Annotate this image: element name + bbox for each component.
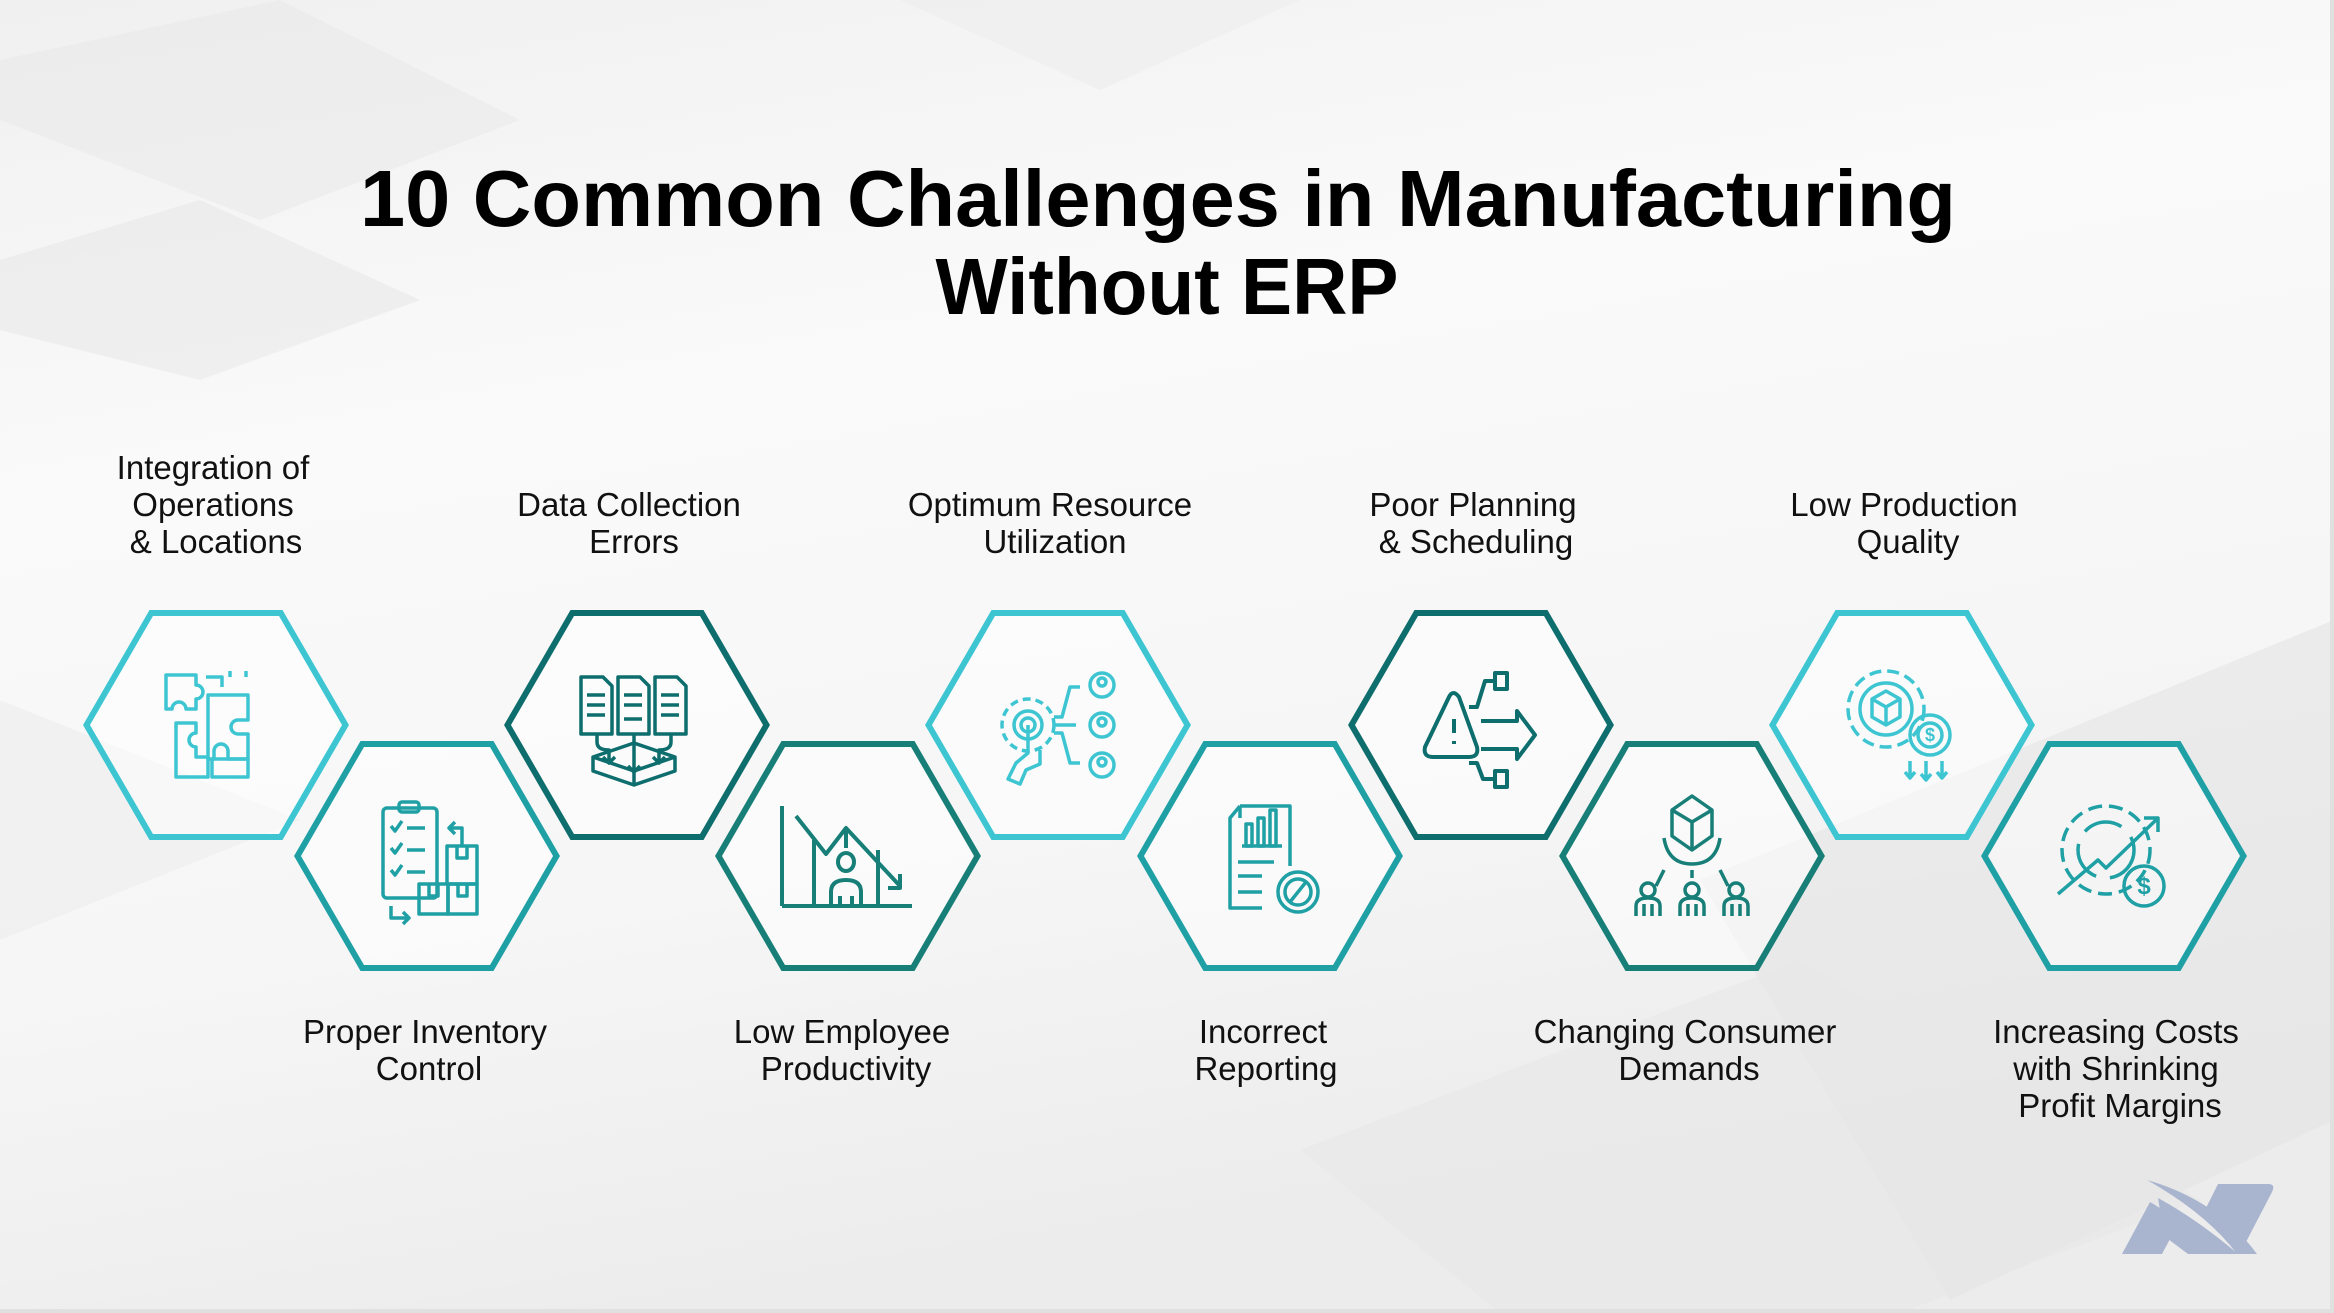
icon: gear box coin: $ [1925,725,1935,745]
label: consumer demands: Changing Consumer [1534,1013,1836,1050]
title: 10 Common Challenges in Manufacturing [360,154,1956,243]
label: data collection: Errors [589,523,679,560]
hex 10: increasing costs [1984,744,2244,968]
label: increasing costs: with Shrinking [2012,1050,2219,1087]
label: inventory: Control [376,1050,482,1087]
label: increasing costs: Profit Margins [2018,1087,2222,1124]
title: Without ERP [936,242,1398,331]
icon: clipboard boxes [383,802,477,924]
icon: cube and people [1636,796,1748,916]
label: incorrect reporting: Incorrect [1199,1013,1327,1050]
hex 2: inventory [298,744,556,968]
label: integration: Integration of [117,449,309,486]
icon: report with no-sign [1230,806,1318,912]
label: consumer demands: Demands [1618,1050,1760,1087]
icon: gear arrow dollar [2058,806,2164,906]
label: poor planning: Poor Planning [1369,486,1577,523]
label: low production quality: Low Production [1790,486,2018,523]
label: optimum resource: Utilization [983,523,1127,560]
top labels [117,449,2018,560]
label: incorrect reporting: Reporting [1194,1050,1338,1087]
label: integration: Operations [132,486,294,523]
hex 3: data collection [508,613,766,837]
hex 7: poor planning [1352,613,1610,837]
logo [2122,1180,2273,1254]
label: low production quality: Quality [1857,523,1960,560]
label: poor planning: & Scheduling [1379,523,1573,560]
label: increasing costs: Increasing Costs [1993,1013,2239,1050]
label: integration: & Locations [130,523,302,560]
label: employee productivity: Low Employee [734,1013,950,1050]
hex 8: consumer demands [1562,744,1822,968]
label: optimum resource: Optimum Resource [908,486,1192,523]
label: inventory: Proper Inventory [303,1013,547,1050]
hex 9: production quality [1772,613,2032,837]
icon: puzzle [166,671,248,777]
icon: gear arrow dollar: $ [2137,873,2151,900]
icon: documents into tray [581,677,686,785]
icon: gear box coin [1848,671,1950,780]
label: data collection: Data Collection [517,486,741,523]
hex 6: incorrect reporting [1140,744,1400,968]
hex 4: employee productivity [718,744,978,968]
hex 5: optimum resource [928,613,1188,837]
title [360,154,1956,331]
label: employee productivity: Productivity [761,1050,932,1087]
icon: warning branches [1425,673,1535,787]
icon: declining chart with person [782,806,912,906]
bottom labels [303,1013,2239,1124]
icon: gear hand people [1002,673,1114,784]
hex 1: integration [86,613,346,837]
